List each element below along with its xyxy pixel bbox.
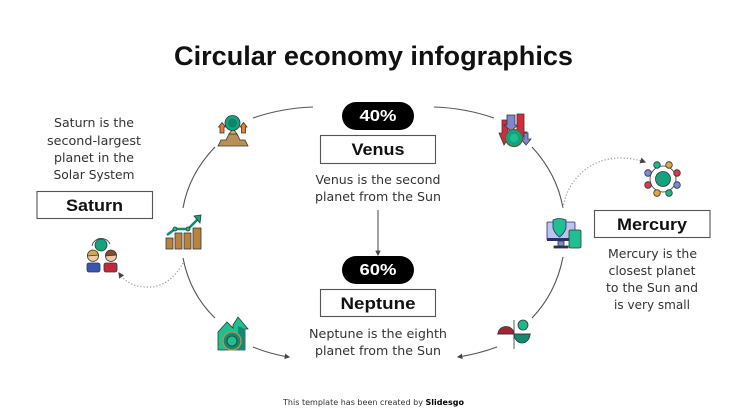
icon: balance chart with coin	[497, 320, 531, 349]
text: Mercury description: to the Sun and	[606, 280, 698, 295]
title: Circular economy infographics	[174, 41, 573, 71]
heading: Neptune: Neptune	[340, 294, 416, 313]
dotted arrow: growth to people	[119, 263, 183, 287]
panel: Venus	[315, 102, 441, 204]
heading: Venus: Venus	[352, 140, 404, 159]
text: Neptune description	[309, 326, 447, 358]
text: Saturn description: Solar System	[54, 167, 134, 182]
icon: gold bars with coin	[218, 116, 248, 146]
panel: Neptune	[309, 256, 447, 358]
panel: Mercury	[594, 210, 710, 312]
text: Venus description: Venus is the second	[316, 172, 440, 187]
badge: 60%: 60%	[360, 262, 396, 279]
text: Neptune description: planet from the Sun	[315, 343, 441, 358]
badge: 40%: 40%	[360, 108, 396, 125]
text: Saturn description: second-largest	[47, 133, 141, 148]
text: Mercury description: Mercury is the	[608, 246, 697, 261]
text: Mercury description	[606, 246, 698, 312]
icon: house with upward arrows and coin	[218, 317, 248, 350]
text: Saturn description: planet in the	[54, 150, 134, 165]
arrow: Venus to Neptune	[377, 210, 379, 255]
text: Mercury description: closest planet	[608, 263, 696, 278]
icon: monitor with shield and phone	[547, 218, 581, 248]
text: Mercury description: is very small	[614, 297, 690, 312]
icon: coins growth chart	[166, 215, 201, 249]
text: Venus description: planet from the Sun	[315, 189, 441, 204]
icon: network with coin	[645, 162, 680, 196]
heading: Saturn: Saturn	[66, 196, 123, 215]
text: Neptune description: Neptune is the eighth	[309, 326, 447, 341]
dotted arrow: monitor to network	[563, 158, 645, 208]
text: Saturn description	[47, 115, 141, 182]
text: Saturn description: Saturn is the	[54, 115, 134, 130]
heading: Mercury: Mercury	[617, 215, 688, 234]
footer credit: This template has been created by Slidesgo	[282, 398, 464, 407]
text: Venus description	[315, 172, 441, 204]
icon: red and blue down arrows with coin	[499, 114, 531, 146]
circular arrows ring	[183, 107, 563, 357]
panel: Saturn	[37, 115, 152, 218]
icon: two people with coin	[87, 238, 117, 272]
